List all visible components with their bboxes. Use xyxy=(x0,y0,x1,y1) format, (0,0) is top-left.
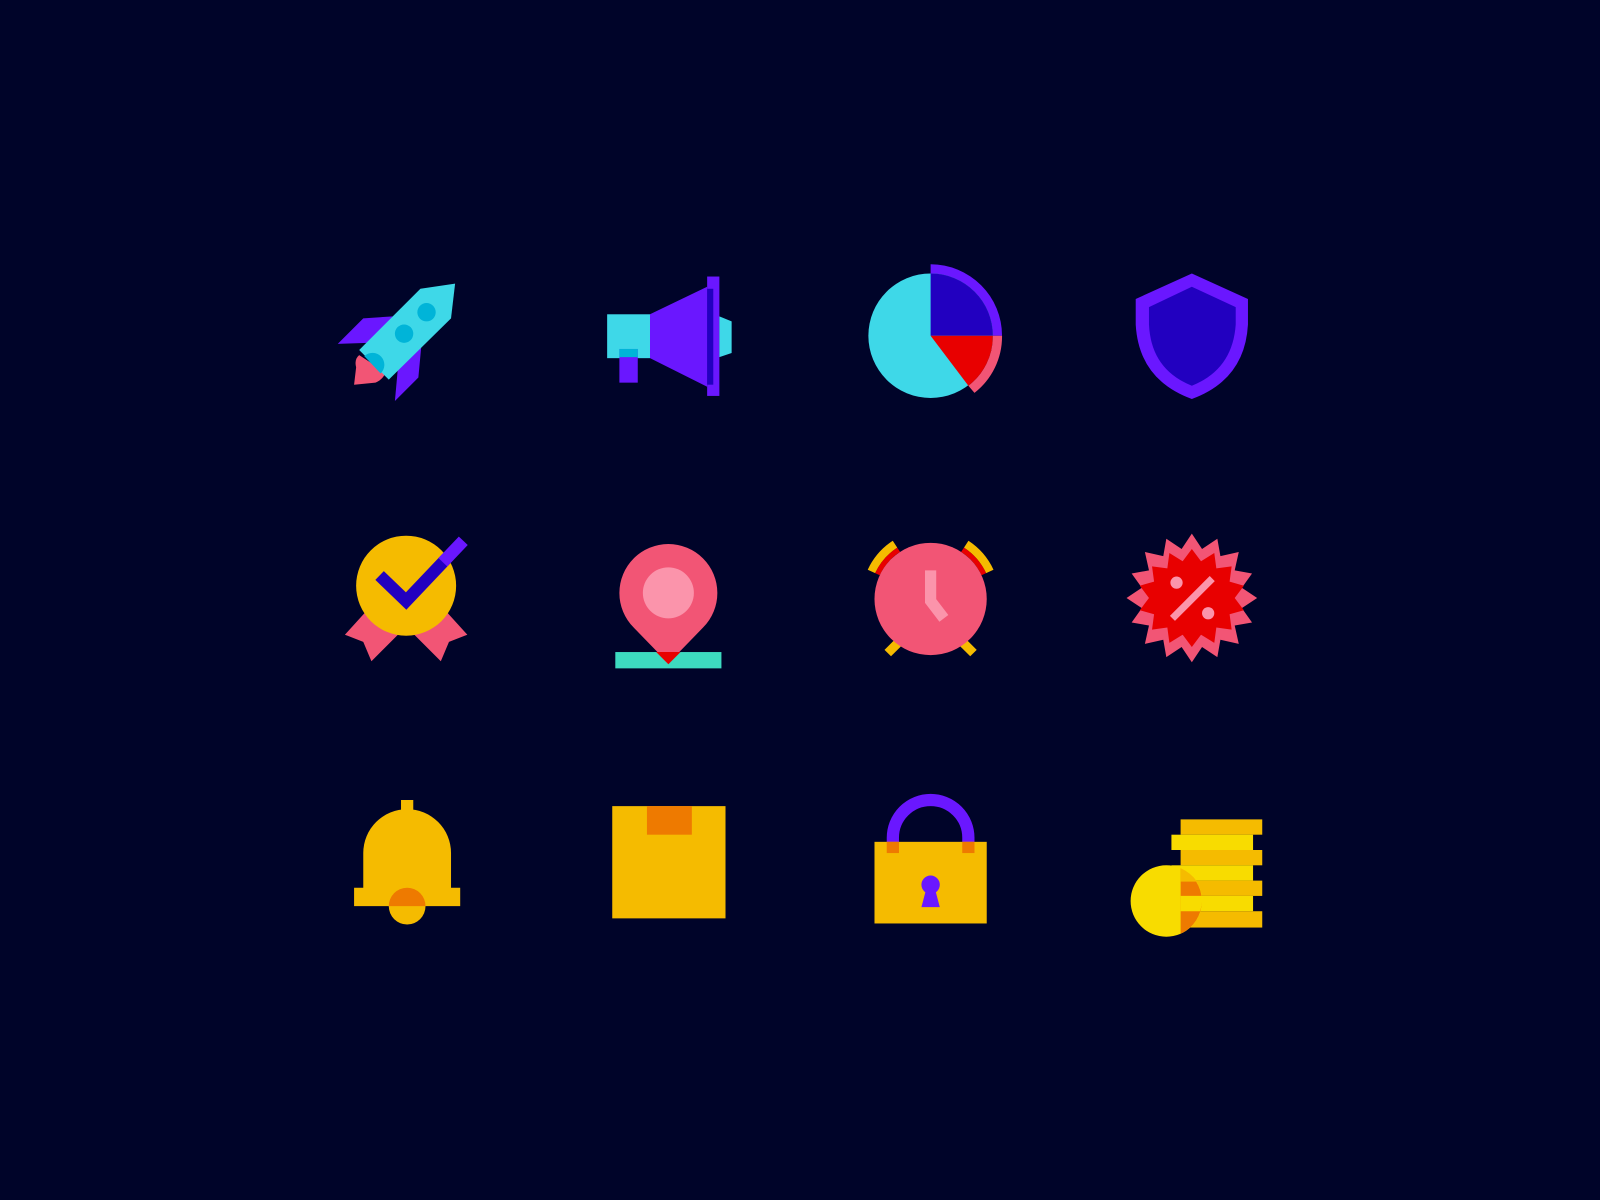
icon: pie chart xyxy=(868,264,1002,398)
icon: megaphone xyxy=(607,277,732,396)
icon: rocket xyxy=(338,284,455,401)
icon: location pin xyxy=(615,544,721,668)
icon: padlock xyxy=(874,800,987,923)
icon: award badge xyxy=(345,536,467,661)
icon: shield xyxy=(1136,273,1248,399)
icon: bell xyxy=(354,800,460,924)
icon: alarm clock xyxy=(871,543,990,655)
icon: discount sticker xyxy=(1127,534,1257,662)
icon: box xyxy=(612,806,726,918)
icon: coin stack xyxy=(1131,819,1262,937)
